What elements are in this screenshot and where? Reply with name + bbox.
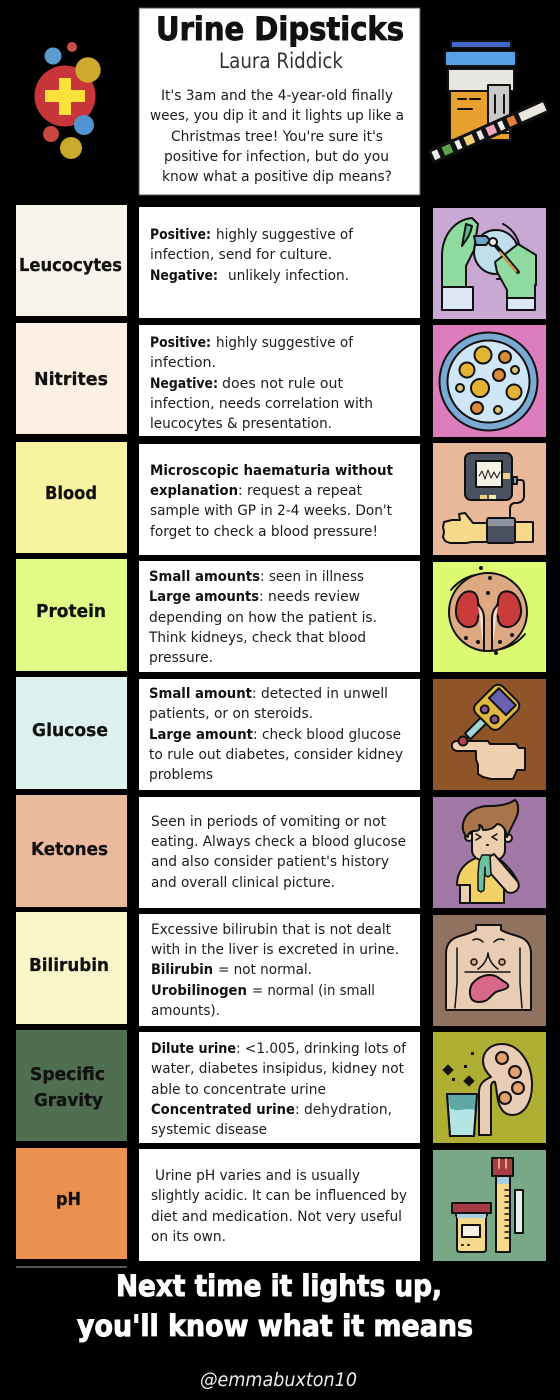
label: bilirubin (16, 912, 127, 1024)
label: ketones (16, 795, 127, 907)
text: leucocytes (139, 207, 420, 318)
icon: bubbles and plus (34, 42, 101, 159)
row: pH (16, 1148, 546, 1261)
text: nitrites: highly suggestive of (216, 334, 354, 351)
intro text: wees, you dip it and it lights up like a (150, 107, 404, 124)
text: blood (139, 444, 420, 555)
text: bilirubin: with in the liver is excreted in urine. (151, 941, 399, 958)
text: nitrites (139, 325, 420, 436)
label: leucocytes (16, 205, 127, 316)
text: pH (139, 1149, 420, 1261)
text: ketones: Seen in periods of vomiting or not (151, 813, 386, 830)
label: blood: Blood (45, 483, 97, 504)
intro text: know what a positive dip means? (162, 168, 392, 185)
dipstick (428, 99, 549, 163)
icon: gloved hands with petri dish (433, 208, 546, 319)
text: nitrites: does not rule out (222, 375, 343, 392)
text: pH: slightly acidic. It can be influenced by (151, 1187, 407, 1204)
row: glucose (16, 677, 546, 790)
text: pH: diet and medication. Not very useful (151, 1208, 402, 1225)
text: nitrites: leucocytes & presentation. (150, 415, 332, 432)
text: specific gravity: : <1.005, drinking lots of (236, 1040, 407, 1057)
closing message: you'll know what it means (77, 1309, 473, 1343)
text: nitrites: infection, needs correlation with (150, 395, 373, 412)
label: ketones: Ketones (31, 839, 108, 860)
text: protein: pressure. (149, 649, 213, 666)
text: nitrites: Positive: (150, 334, 211, 351)
icon: kidney and water glass (433, 1032, 546, 1143)
text: blood: Microscopic haematuria without (150, 462, 393, 479)
text: ketones (139, 797, 420, 908)
row: specific gravity (16, 1030, 546, 1143)
row: bilirubin (16, 912, 546, 1026)
label: specific gravity: Gravity (34, 1090, 103, 1111)
label: blood (16, 442, 127, 553)
icon: glucose meter and finger (433, 679, 546, 790)
text: glucose: Small amount (149, 685, 252, 702)
text: bilirubin: Excessive bilirubin that is not dealt (151, 921, 391, 938)
text: glucose: problems (149, 766, 213, 783)
text: protein: Think kidneys, check that blood (148, 629, 366, 646)
row: nitrites (16, 323, 546, 437)
label: glucose (16, 677, 127, 789)
text: leucocytes: Negative: (150, 267, 218, 284)
text: glucose (139, 679, 420, 790)
text: ketones: and overall clinical picture. (151, 874, 335, 891)
text: specific gravity: : dehydration, (295, 1101, 392, 1118)
text: nitrites: infection. (150, 354, 216, 371)
text: pH: on its own. (151, 1228, 226, 1245)
text: glucose: patients, or on steroids. (149, 705, 313, 722)
text: glucose: to rule out diabetes, consider kidney (149, 746, 403, 763)
icon: kidneys (433, 562, 546, 672)
icon: sample pot, tube and strip (433, 1150, 546, 1261)
text: leucocytes: highly suggestive of (216, 226, 354, 243)
text: specific gravity (139, 1032, 420, 1143)
credit: @emmabuxton10 (200, 1369, 357, 1391)
text: bilirubin: Urobilinogen (151, 982, 247, 999)
text: ketones: and also consider patient's history (151, 853, 389, 870)
stray line under pH (16, 1266, 127, 1268)
icon: blood pressure monitor (433, 443, 546, 555)
label: pH: pH (56, 1189, 81, 1210)
intro text (150, 87, 404, 185)
text: specific gravity: able to concentrate urine (151, 1081, 326, 1098)
author: Laura Riddick (219, 49, 344, 73)
text: bilirubin: = not normal. (218, 961, 312, 978)
panel: header (139, 8, 420, 195)
text: protein: : needs review (259, 588, 360, 605)
text: blood: sample with GP in 2-4 weeks. Don't (150, 502, 392, 519)
label: specific gravity (16, 1030, 127, 1141)
closing message (77, 1269, 473, 1343)
label: specific gravity: Specific (30, 1064, 105, 1085)
text: bilirubin: = normal (in small (252, 982, 375, 999)
text: nitrites: Negative: (150, 375, 218, 392)
row: ketones (16, 795, 546, 908)
row: protein (16, 559, 546, 672)
icon: petri dish (433, 325, 546, 437)
label: nitrites: Nitrites (34, 369, 108, 390)
text: protein: Small amounts (149, 568, 260, 585)
label: nitrites (16, 323, 127, 434)
text: protein: Large amounts (149, 588, 259, 605)
text: specific gravity: Concentrated urine (151, 1101, 295, 1118)
text: specific gravity: Dilute urine (151, 1040, 236, 1057)
row: blood (16, 442, 546, 555)
icon: torso with liver (433, 915, 546, 1026)
intro text: positive for infection, but do you (164, 148, 389, 165)
label: pH (16, 1148, 127, 1259)
text: protein: depending on how the patient is. (149, 609, 377, 626)
text: leucocytes: unlikely infection. (228, 267, 349, 284)
text: bilirubin (139, 914, 420, 1026)
text: blood: forget to check a blood pressure! (150, 523, 378, 540)
closing message: Next time it lights up, (116, 1269, 442, 1303)
text: ketones: eating. Always check a blood glucose (151, 833, 406, 850)
label: bilirubin: Bilirubin (29, 955, 109, 976)
text: specific gravity: water, diabetes insipidus, kidney not (151, 1060, 404, 1077)
icon: urine cup and dipstick (428, 41, 549, 163)
text: protein (139, 561, 420, 672)
text: glucose: Large amount (149, 726, 253, 743)
text: blood: : request a repeat (238, 482, 362, 499)
label: protein: Protein (36, 601, 106, 622)
title: Urine Dipsticks (156, 10, 404, 48)
text: specific gravity: systemic disease (151, 1121, 267, 1138)
icon: vomiting person (433, 797, 546, 908)
text: glucose: : detected in unwell (252, 685, 388, 702)
text: protein: : seen in illness (260, 568, 364, 585)
intro text: It's 3am and the 4-year-old finally (161, 87, 393, 104)
text: leucocytes: Positive: (150, 226, 211, 243)
intro text: Christmas tree! You're sure it's (171, 128, 383, 145)
text: leucocytes: infection, send for culture. (150, 246, 332, 263)
text: bilirubin: amounts). (151, 1002, 220, 1019)
label: leucocytes: Leucocytes (19, 255, 122, 276)
text: glucose: : check blood glucose (253, 726, 401, 743)
text: bilirubin: Bilirubin (151, 961, 213, 978)
row: leucocytes (16, 205, 546, 319)
label: glucose: Glucose (32, 720, 108, 741)
text: pH: Urine pH varies and is usually (155, 1167, 360, 1184)
text: blood: explanation (150, 482, 238, 499)
label: protein (16, 559, 127, 671)
